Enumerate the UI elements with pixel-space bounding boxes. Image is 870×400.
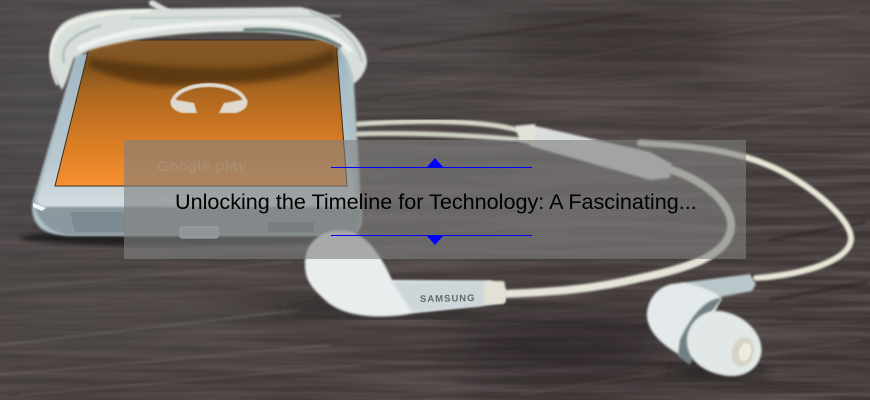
phone screen	[55, 40, 347, 186]
home key	[163, 195, 200, 201]
icon: headphones	[170, 85, 248, 113]
inline remote	[515, 124, 672, 180]
phone	[32, 40, 362, 238]
Google play label: Google play	[157, 158, 247, 175]
SAMSUNG wordmark: SAMSUNG	[420, 293, 476, 305]
bottom divider with down triangle	[331, 235, 532, 245]
earphone cable loop	[503, 143, 851, 294]
title text: Unlocking the Timeline for Technology: A Fascinating...	[175, 189, 697, 214]
translucent title panel	[124, 140, 746, 259]
top divider with up triangle	[331, 158, 532, 168]
phone port and speaker	[180, 227, 218, 238]
left earbud with SAMSUNG stem	[280, 231, 505, 318]
right earbud	[647, 274, 765, 380]
cable coil around phone	[50, 3, 367, 90]
upper earphone cables	[358, 122, 522, 140]
